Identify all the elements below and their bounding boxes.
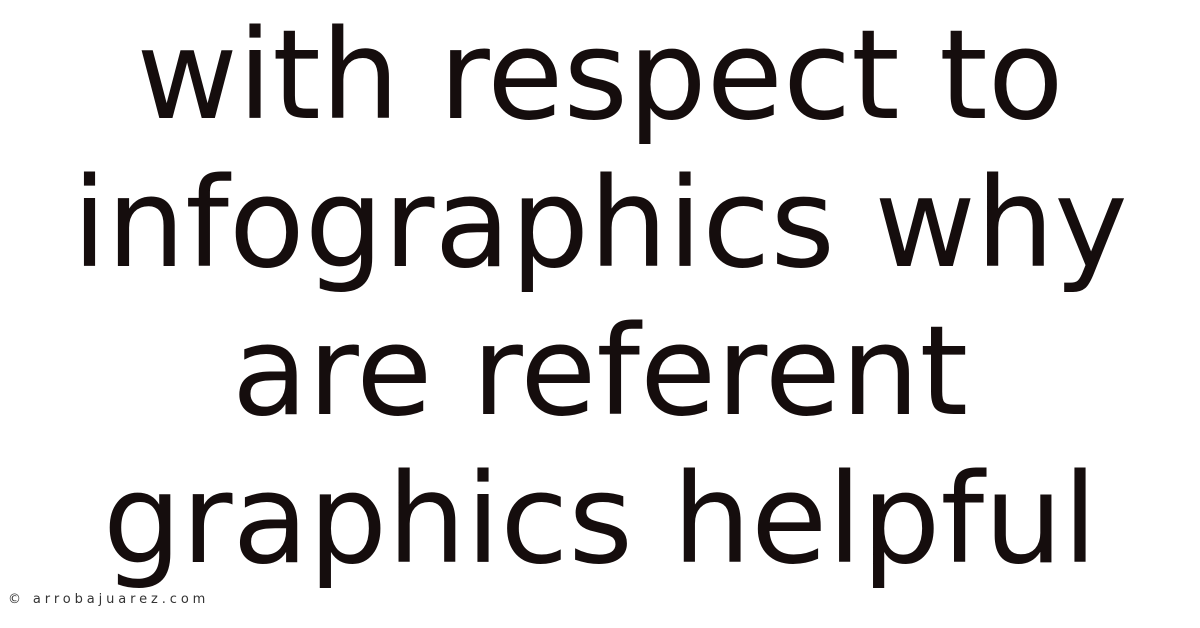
- watermark: © arrobajuarez.com: [8, 592, 209, 607]
- title: with respect to: [136, 4, 1064, 148]
- title: are referent: [232, 300, 968, 444]
- title: infographics why: [72, 152, 1128, 296]
- title: graphics helpful: [103, 448, 1097, 592]
